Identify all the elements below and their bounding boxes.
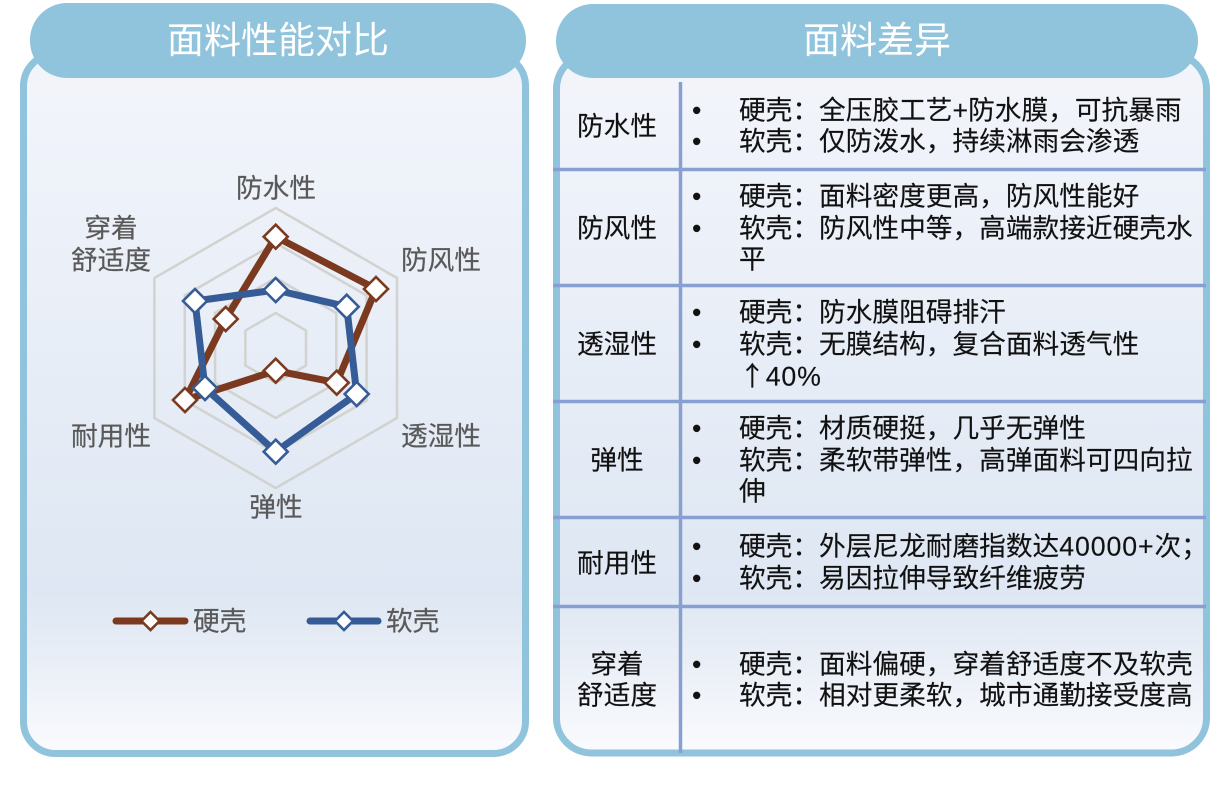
axis labels: [71, 174, 481, 523]
row: breathability: 透湿性: [577, 330, 657, 360]
right panel heading: 面料差异: [803, 20, 951, 61]
axis labels: 防风性: [401, 246, 481, 276]
row: comfort: 舒适度: [577, 681, 657, 711]
row: elasticity: 弹性: [590, 446, 644, 476]
row: comfort: 硬壳：面料偏硬，穿着舒适度不及软壳: [739, 650, 1193, 680]
row: durability: [577, 532, 1208, 594]
row: comfort: [577, 650, 1193, 711]
row: windproof: 硬壳：面料密度更高，防风性能好: [739, 182, 1139, 212]
row: elasticity: 硬壳：材质硬挺，几乎无弹性: [739, 414, 1086, 444]
row: windproof: •: [692, 182, 701, 212]
axis labels: 舒适度: [71, 246, 151, 276]
row: comfort: 软壳：相对更柔软，城市通勤接受度高: [739, 681, 1193, 711]
series line: hard shell: [173, 225, 388, 412]
row: comfort: 穿着: [590, 650, 644, 680]
row: breathability: •: [692, 330, 701, 360]
row: durability: 耐用性: [577, 549, 657, 579]
row: waterproof: 软壳：仅防泼水，持续淋雨会渗透: [739, 127, 1139, 157]
axis labels: 透湿性: [401, 422, 481, 452]
row: breathability: 硬壳：防水膜阻碍排汗: [739, 298, 1006, 328]
row: windproof: 防风性: [577, 214, 657, 244]
row: breathability: [577, 298, 1139, 394]
row: windproof: [577, 182, 1193, 275]
row: durability: •: [692, 564, 701, 594]
right panel frame: [556, 54, 1206, 753]
radar grid: [154, 208, 397, 488]
row: waterproof: 硬壳：全压胶工艺+防水膜，可抗暴雨: [739, 96, 1182, 126]
row: breathability: 软壳：无膜结构，复合面料透气性: [739, 330, 1139, 360]
row: breathability: •: [692, 298, 701, 328]
legend: hard shell: [116, 607, 246, 637]
row: durability: •: [692, 532, 701, 562]
row: elasticity: 伸: [739, 477, 766, 507]
axis labels: 穿着: [84, 214, 138, 244]
row: windproof: 平: [739, 245, 766, 275]
row: waterproof: [577, 96, 1182, 157]
row: windproof: •: [692, 214, 701, 244]
left panel heading: 面料性能对比: [167, 20, 389, 61]
left panel heading: [30, 3, 526, 78]
row: waterproof: 防水性: [577, 112, 657, 142]
axis labels: 耐用性: [71, 422, 151, 452]
row: durability: 软壳：易因拉伸导致纤维疲劳: [739, 564, 1086, 594]
legend: [116, 607, 439, 637]
panel: fabric performance comparison: [24, 3, 526, 754]
row: elasticity: •: [692, 414, 701, 444]
left panel frame: [24, 54, 526, 754]
right panel heading: [556, 4, 1198, 78]
row: windproof: 软壳：防风性中等，高端款接近硬壳水: [739, 214, 1193, 244]
axis labels: 弹性: [249, 493, 303, 523]
row: waterproof: •: [692, 127, 701, 157]
row: elasticity: 软壳：柔软带弹性，高弹面料可四向拉: [739, 446, 1193, 476]
series line: soft shell: [183, 278, 369, 464]
row: waterproof: •: [692, 96, 701, 126]
panel: fabric differences: [553, 4, 1208, 753]
legend: hard shell: 硬壳: [193, 607, 246, 637]
row: comfort: •: [692, 650, 701, 680]
legend: soft shell: 软壳: [386, 607, 439, 637]
radar chart: [71, 174, 481, 523]
row: breathability: ↑40%: [739, 355, 822, 394]
row: elasticity: •: [692, 446, 701, 476]
row: durability: 硬壳：外层尼龙耐磨指数达40000+次；: [739, 532, 1208, 562]
axis labels: 防水性: [236, 174, 316, 204]
table grid: [553, 82, 1206, 753]
legend: soft shell: [310, 607, 439, 637]
row: comfort: •: [692, 681, 701, 711]
row: elasticity: [590, 414, 1193, 507]
